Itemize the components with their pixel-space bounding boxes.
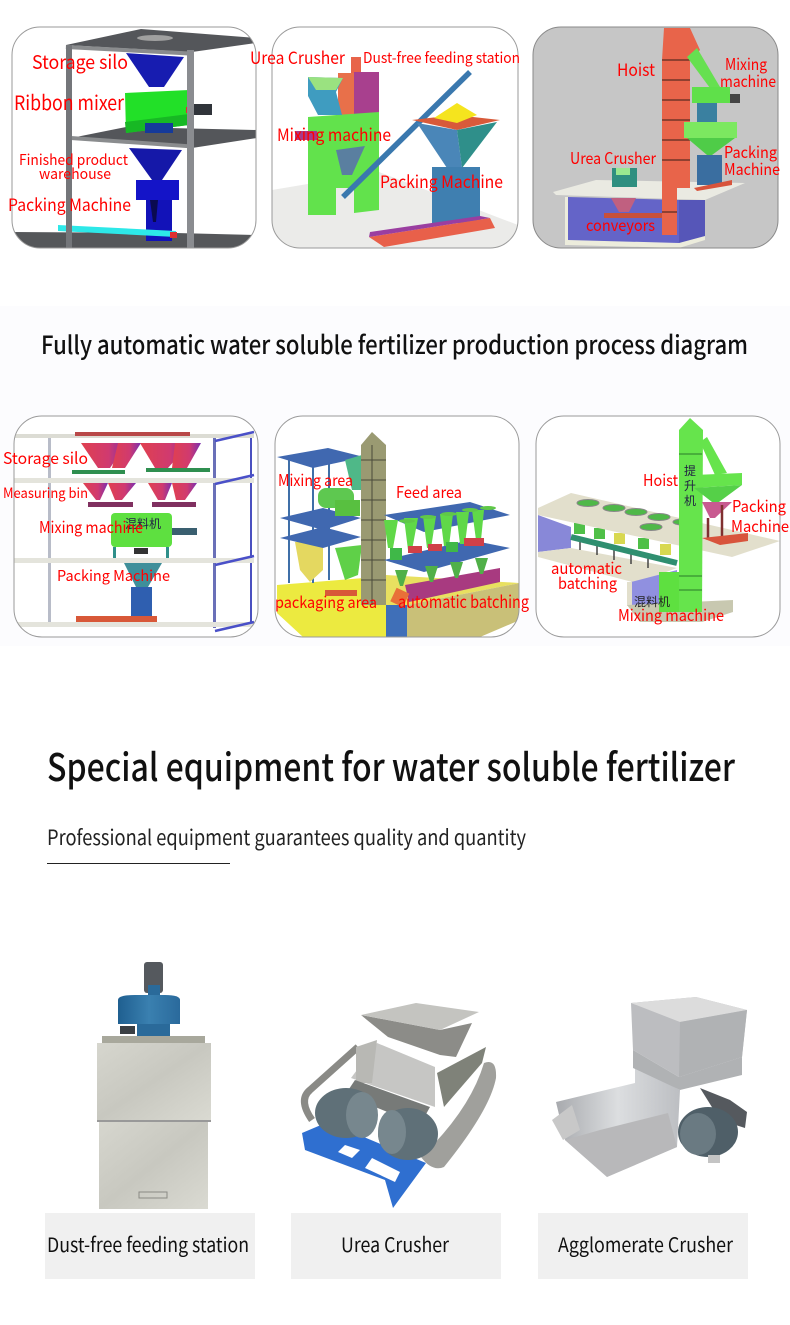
caption: dust-free feeding station: Dust-free feeding station: [47, 1229, 249, 1258]
photo: agglomerate crusher: [552, 997, 747, 1177]
label: mixing machine: machine: [720, 68, 776, 92]
label: mixing machine: [720, 51, 776, 92]
label: mixing machine: Mixing machine: [618, 602, 724, 626]
label: urea crusher: Urea Crusher: [250, 44, 345, 69]
caption: agglomerate crusher: Agglomerate Crusher: [558, 1229, 733, 1258]
label: packing machine: Machine: [724, 156, 780, 180]
label: urea crusher: Urea Crusher: [570, 145, 657, 169]
label: automatic batching: automatic: [551, 555, 622, 579]
label: automatic batching: batching: [558, 570, 617, 594]
label: ribbon mixer: Ribbon mixer: [14, 87, 124, 116]
label: conveyors: conveyors: [586, 212, 655, 236]
panel: feed area automatic line: [275, 416, 529, 637]
artwork: batching hoist line: 机: [684, 492, 696, 509]
panel: storage silo automatic line: [3, 416, 258, 637]
photo: urea crusher: [302, 1003, 496, 1208]
background band: process diagram section: [0, 306, 790, 646]
label: packing machine: [724, 139, 780, 180]
artwork: feed area automatic line: [275, 416, 520, 637]
caption: urea crusher: [291, 1213, 501, 1279]
label: mixing machine: Mixing: [725, 51, 767, 75]
photo: dust-free feeding station: [97, 962, 211, 1209]
label: hoist: Hoist: [643, 467, 678, 491]
label: storage silo: Storage silo: [32, 48, 128, 75]
artwork: batching hoist line: 升: [684, 477, 696, 494]
panel: urea crusher line: [250, 27, 520, 248]
label: packing machine: Packing Machine: [380, 168, 503, 193]
artwork: hoist line: [533, 27, 778, 248]
artwork: storage silo automatic line: 混料机: [125, 515, 161, 532]
artwork: batching hoist line: 混料机: [634, 593, 670, 610]
label: finished product warehouse: warehouse: [39, 163, 111, 184]
artwork: storage silo automatic line: [14, 430, 254, 632]
panel: batching hoist line: [536, 416, 789, 637]
artwork: ribbon mixer line: [12, 27, 257, 248]
artwork: urea crusher line: [272, 57, 517, 248]
panel: ribbon mixer line: [8, 27, 257, 248]
label: packing machine: [731, 493, 789, 537]
panel: hoist line: [533, 27, 780, 248]
label: mixing machine: Mixing machine: [277, 121, 391, 146]
label: packing machine: Packing: [732, 493, 786, 517]
label: hoist: Hoist: [617, 56, 656, 81]
artwork: batching hoist line: 提: [684, 462, 696, 479]
artwork: batching hoist line: [536, 416, 780, 637]
label: automatic batching: [551, 555, 622, 594]
label: packing machine: Packing: [724, 139, 777, 163]
caption: urea crusher: Urea Crusher: [341, 1229, 449, 1258]
caption: dust-free feeding station: [45, 1213, 255, 1279]
label: packing machine: Packing Machine: [57, 565, 170, 586]
label: packing machine: Packing Machine: [8, 191, 131, 216]
label: measuring bin: Measuring bin: [3, 483, 88, 503]
label: finished product warehouse: [19, 149, 128, 184]
label: automatic batching: automatic batching: [398, 588, 529, 613]
label: packaging area: packaging area: [275, 589, 377, 613]
caption: agglomerate crusher: [538, 1213, 748, 1279]
label: finished product warehouse: Finished product: [19, 149, 128, 170]
subheading: professional equipment: Professional equipment guarantees quality and quantity: [47, 822, 526, 852]
label: dust-free feeding station: Dust-free feeding station: [363, 47, 520, 68]
label: mixing area: Mixing area: [278, 467, 353, 491]
label: mixing machine: Mixing machine: [39, 514, 143, 538]
label: storage silo: Storage silo: [3, 445, 88, 469]
label: feed area: Feed area: [396, 479, 462, 503]
